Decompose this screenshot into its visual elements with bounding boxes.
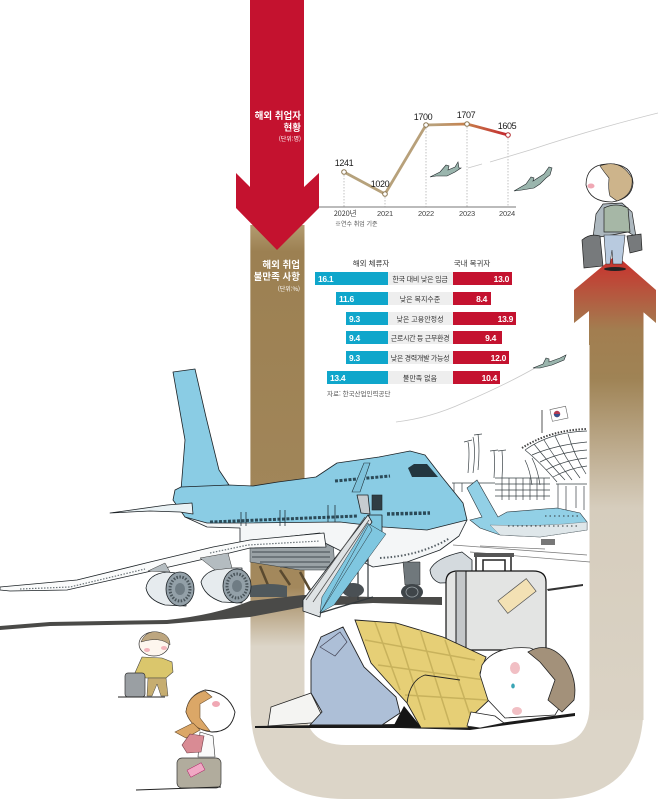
luggage tag <box>498 579 536 613</box>
diverging bar chart: 자료: 한국산업인력공단 <box>327 388 390 398</box>
heading: overseas employment: 해외 취업자 <box>255 108 301 122</box>
wing <box>0 533 326 591</box>
line chart: 1241 <box>335 158 354 168</box>
cockpit windows <box>408 464 438 477</box>
upper deck windows <box>335 476 390 481</box>
small man with suitcase <box>118 632 173 697</box>
diverging bar chart: 한국 대비 낮은 임금 <box>392 274 448 284</box>
traveler standing on arrow <box>582 164 642 271</box>
diverging bar chart: 9.3 <box>349 353 360 363</box>
contrail lines <box>396 113 658 422</box>
heading: dissatisfaction: (단위:%) <box>278 284 300 293</box>
belly hatching <box>380 538 450 558</box>
feet <box>268 693 325 726</box>
line chart: 2020년 <box>334 208 357 219</box>
diverging bar chart: 국내 복귀자 <box>454 258 490 269</box>
heading: overseas employment <box>255 108 301 143</box>
line chart: ※연수 취업 기준 <box>335 219 378 228</box>
pylons <box>148 553 232 572</box>
line chart <box>319 110 517 228</box>
upper door strip <box>352 463 370 492</box>
diverging bar chart: 근로시간 등 근무환경 <box>391 334 449 344</box>
plaid shirt <box>355 620 489 728</box>
horizontal stabilizer <box>110 503 193 514</box>
diverging bar chart: 13.9 <box>498 314 514 324</box>
hatching <box>252 552 330 567</box>
grey door <box>357 495 370 514</box>
diverging bar chart: 낮은 경력개발 가능성 <box>391 354 449 364</box>
shadow <box>0 595 442 630</box>
stair railing <box>303 515 372 617</box>
diverging bar chart: 13.4 <box>330 373 346 383</box>
diverging bar chart: 낮은 복지수준 <box>400 294 441 304</box>
elbow line <box>407 675 460 703</box>
diverging bar chart: 9.4 <box>485 333 497 343</box>
red down arrow <box>236 0 319 250</box>
diverging bar chart <box>315 258 516 398</box>
diverging bar chart: 10.4 <box>482 373 498 383</box>
small plane icons <box>430 162 566 368</box>
line chart: 2022 <box>418 209 434 218</box>
jeans <box>310 627 400 725</box>
fuselage <box>173 451 467 530</box>
diverging bar chart: 9.3 <box>349 314 360 324</box>
arm <box>467 712 504 728</box>
front windows <box>387 513 430 514</box>
door strips <box>241 505 335 526</box>
heading: overseas employment: (단위:명) <box>279 134 301 143</box>
landing gear <box>403 562 420 585</box>
line chart: 1707 <box>457 110 476 120</box>
small girl with suitcase <box>136 690 235 790</box>
belly <box>185 512 467 567</box>
diverging bar chart: 12.0 <box>491 353 507 363</box>
ground mark <box>547 584 583 591</box>
head <box>480 648 570 718</box>
line chart: 2023 <box>459 209 475 218</box>
line chart: 2024 <box>499 209 515 218</box>
diverging bar chart: 해외 체류자 <box>353 258 389 269</box>
U-shaped flow band <box>250 225 644 799</box>
diverging bar chart: 16.1 <box>318 274 334 284</box>
diverging bar chart: 불만족 없음 <box>403 374 438 384</box>
stair legs <box>320 535 373 613</box>
hair <box>528 648 575 712</box>
floor shadow <box>255 713 575 730</box>
line chart: 1700 <box>414 112 433 122</box>
line chart: 1020 <box>371 179 390 189</box>
airplane illustration <box>0 369 472 630</box>
heading: overseas employment: 현황 <box>284 120 301 134</box>
dark door <box>372 495 382 510</box>
diverging bar chart: 13.0 <box>494 274 510 284</box>
main deck windows <box>210 516 358 522</box>
crying person lying on floor <box>255 620 575 730</box>
diverging bar chart: 낮은 고용안정성 <box>396 314 444 324</box>
heading: dissatisfaction: 해외 취업 <box>262 257 300 271</box>
black gap <box>393 706 421 727</box>
diverging bar chart: 9.4 <box>349 333 360 343</box>
jeans pocket <box>320 632 347 656</box>
diverging bar chart: 8.4 <box>476 294 488 304</box>
wing hatching <box>20 541 320 589</box>
cargo detail <box>260 566 310 590</box>
background plane <box>453 480 590 562</box>
tail fin <box>173 369 229 490</box>
blue door panel <box>369 515 382 532</box>
line chart: 2021 <box>377 209 393 218</box>
suitcase <box>446 553 546 650</box>
line chart: 1605 <box>498 121 517 131</box>
background terminal building <box>452 410 587 510</box>
engine left <box>146 572 186 606</box>
blue ramp <box>320 523 386 613</box>
under-wing structure <box>250 540 335 570</box>
icon: Korean flag <box>550 406 568 421</box>
diverging bar chart: 11.6 <box>339 294 354 304</box>
blush and tear <box>510 662 520 674</box>
heading: dissatisfaction <box>254 257 300 293</box>
waiting passengers <box>250 584 287 597</box>
heading: dissatisfaction: 불만족 사항 <box>254 269 300 283</box>
stair machinery <box>342 583 364 597</box>
red up arrow <box>574 255 656 345</box>
engine middle <box>201 568 242 603</box>
engine right <box>430 552 472 583</box>
